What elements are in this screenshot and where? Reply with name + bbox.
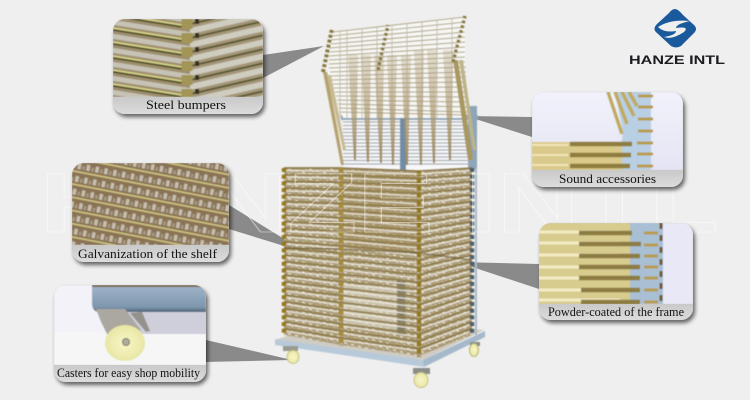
connector: sound accessories: [466, 116, 532, 137]
caption: sound accessories: Sound accessories: [559, 171, 656, 186]
photo: steel bumpers: [113, 19, 263, 97]
connector: steel bumpers: [263, 46, 324, 78]
panel: steel bumpers: [113, 19, 263, 114]
drying rack: [275, 16, 485, 388]
photo: galvanized shelf: [72, 163, 229, 245]
caption bar: [72, 245, 229, 262]
caption bar: [54, 365, 206, 382]
caption bar: [532, 170, 683, 187]
caption: casters: Casters for easy shop mobility: [57, 365, 200, 380]
base platform: [275, 318, 485, 367]
connector: powder-coated frame: [457, 262, 539, 289]
photo: sound accessories: [532, 92, 683, 170]
caption bar: [539, 304, 693, 320]
panel: powder-coated frame: [539, 223, 693, 320]
caption: powder-coated frame: Powder-coated of the frame: [548, 304, 684, 319]
upper rack tilted shelves: [323, 16, 476, 165]
panel: galvanization: [72, 163, 229, 262]
upper rack frame: [341, 106, 478, 170]
connector: galvanization: [229, 205, 307, 253]
logo text: HANZE INTL: [629, 55, 725, 67]
watermark: HANZE INTL: [40, 157, 719, 250]
panel: casters: [54, 285, 206, 382]
casters: [283, 342, 480, 388]
photo: powder-coated frame: [539, 223, 693, 304]
caption bar: [113, 97, 263, 114]
caption: galvanization: Galvanization of the shelf: [78, 246, 218, 261]
connector: casters: [206, 340, 292, 362]
photo: caster wheel: [54, 285, 206, 365]
logo mark: [654, 9, 696, 48]
logo: Hanze Intl: [629, 9, 725, 67]
panel: sound accessories: [532, 92, 683, 187]
caption: steel bumpers: Steel bumpers: [146, 97, 226, 112]
lower rack body: [284, 168, 476, 357]
